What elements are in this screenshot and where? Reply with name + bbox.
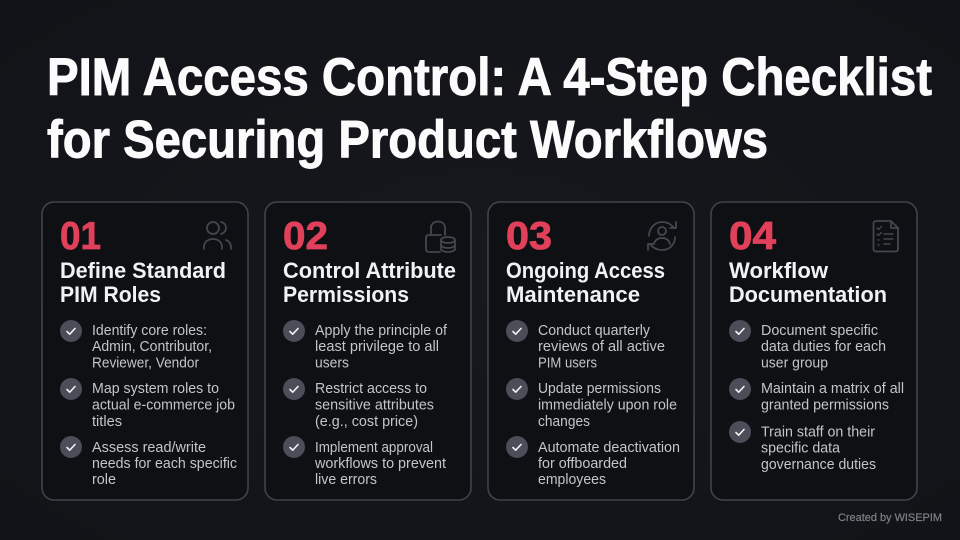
bullet text: Update permissions [538,381,661,397]
bullet text: immediately upon role [538,398,677,414]
bullet text: reviews of all active [538,339,665,355]
bullet text: Assess read/write [92,440,206,456]
step number 04: 04 [729,215,776,258]
heading: Control Attribute [283,258,456,283]
check marks [67,328,75,450]
heading: Permissions [283,282,409,307]
check bullets [506,320,528,458]
heading [506,258,665,307]
bullet text: workflows to prevent [314,456,446,472]
heading [729,258,887,307]
icon: user with refresh arrows [648,222,676,250]
bullet text: Admin, Contributor, [92,339,212,355]
bullet text: Automate deactivation [538,440,680,456]
bullet text: Document specific [761,323,878,339]
bullet text [314,323,448,488]
bullet text: users [315,356,349,372]
bullet text: actual e-commerce job [92,398,235,414]
check marks [736,328,744,435]
check marks [513,328,521,450]
panel: step 01 [42,202,248,500]
heading: Documentation [729,282,887,307]
heading [60,258,226,307]
bullet text: Identify core roles: [92,323,207,339]
check bullets [283,320,305,458]
icon: checklist document [874,221,898,252]
bullet text: specific data [761,440,841,456]
bullet text: Reviewer, Vendor [92,356,199,372]
bullet text: sensitive attributes [315,398,434,414]
heading: Ongoing Access [506,258,665,283]
bullet text: Apply the principle of [315,323,448,339]
bullet text [92,323,237,488]
heading: Define Standard [60,258,226,283]
bullet text [538,323,680,488]
bullet text: Train staff on their [761,424,875,440]
panel: step 03 [488,202,694,500]
title [47,48,932,170]
bullet text: titles [92,414,122,430]
bullet text: Maintain a matrix of all [761,381,904,397]
bullet text: role [92,472,116,488]
bullet text: changes [538,414,590,430]
bullet text: employees [538,472,606,488]
credit: Created by WISEPIM [838,512,942,524]
heading [283,258,456,307]
check bullets [729,320,751,443]
bullet text: for offboarded [538,456,627,472]
icon: lock with database [426,222,455,252]
bullet text: Map system roles to [92,381,219,397]
panel: step 02 [265,202,471,500]
step number 03: 03 [506,215,552,258]
heading: Workflow [729,258,829,283]
bullet text: needs for each specific [92,456,237,472]
check marks [290,328,298,450]
step number 01: 01 [60,215,101,258]
heading: Maintenance [506,282,640,307]
check bullets [60,320,82,458]
bullet text: user group [761,356,828,372]
step number 02: 02 [283,215,328,258]
bullet text: Implement approval [315,440,433,456]
bullet text: live errors [315,472,377,488]
bullet text: least privilege to all [315,339,439,355]
bullet text: PIM users [538,356,597,372]
bullet text: (e.g., cost price) [315,414,418,430]
title: for Securing Product Workflows [47,110,768,170]
icon: users [204,222,231,249]
bullet text: Restrict access to [315,381,427,397]
bullet text: governance duties [761,457,876,473]
bullet text: granted permissions [761,398,889,414]
bullet text: data duties for each [761,339,886,355]
heading: PIM Roles [60,282,161,307]
bullet text: Conduct quarterly [538,323,651,339]
bullet text [761,323,904,473]
panel: step 04 [711,202,917,500]
